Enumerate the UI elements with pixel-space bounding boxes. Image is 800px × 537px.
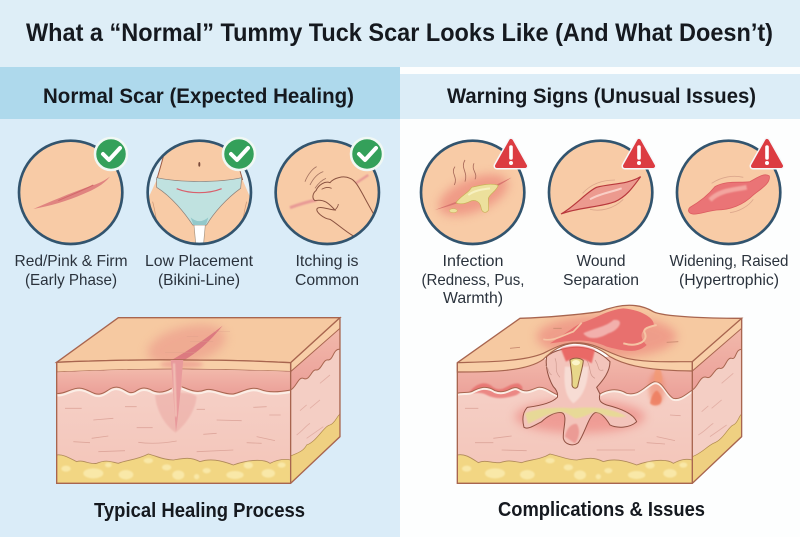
panel: warning sign icons (421, 141, 788, 307)
label: warmth: Warmth) (443, 290, 503, 307)
icon: wound separation (549, 141, 652, 244)
icon: widening raised scar (677, 141, 780, 244)
icon: red pink firm scar (19, 141, 122, 244)
label: low placement: Low Placement (145, 253, 254, 270)
label: wound: Wound (576, 253, 626, 270)
icon: warning triangle 3 (753, 141, 781, 166)
caption: typical healing: Typical Healing Process (94, 500, 305, 522)
icon: itching (276, 141, 380, 244)
skin diagram: typical healing (57, 318, 340, 483)
icon: check badge 1 (95, 138, 127, 170)
label: red pink firm: Red/Pink & Firm (14, 253, 128, 270)
panel: normal scar icons (14, 138, 383, 289)
label: bikini line: (Bikini-Line) (158, 272, 240, 289)
label: infection: Infection (442, 253, 504, 270)
skin diagram: complications (457, 305, 742, 483)
icon: warning triangle 2 (625, 141, 653, 166)
panel: normal scar header (0, 67, 400, 119)
heading: warning signs: Warning Signs (Unusual Issues) (447, 85, 756, 108)
icon: infection (421, 141, 524, 244)
icon: check badge 3 (351, 138, 383, 170)
label: common: Common (295, 272, 359, 289)
panel: warning signs header (400, 74, 800, 119)
label: redness pus: (Redness, Pus, (422, 272, 524, 289)
label: hypertrophic: (Hypertrophic) (679, 272, 779, 289)
label: early phase: (Early Phase) (25, 272, 117, 289)
title band (0, 0, 800, 67)
label: itching is: Itching is (296, 253, 358, 270)
heading: normal scar: Normal Scar (Expected Healing) (43, 85, 354, 108)
icon: warning triangle 1 (497, 141, 525, 166)
panel: left background (0, 119, 400, 537)
title: What a “Normal” Tummy Tuck Scar Looks Like (And What Doesn’t) (26, 19, 773, 47)
icon: low placement (147, 141, 252, 247)
caption: complications: Complications & Issues (498, 499, 705, 521)
label: widening raised: Widening, Raised (670, 253, 788, 270)
icon: check badge 2 (223, 138, 255, 170)
label: separation: Separation (563, 272, 639, 289)
